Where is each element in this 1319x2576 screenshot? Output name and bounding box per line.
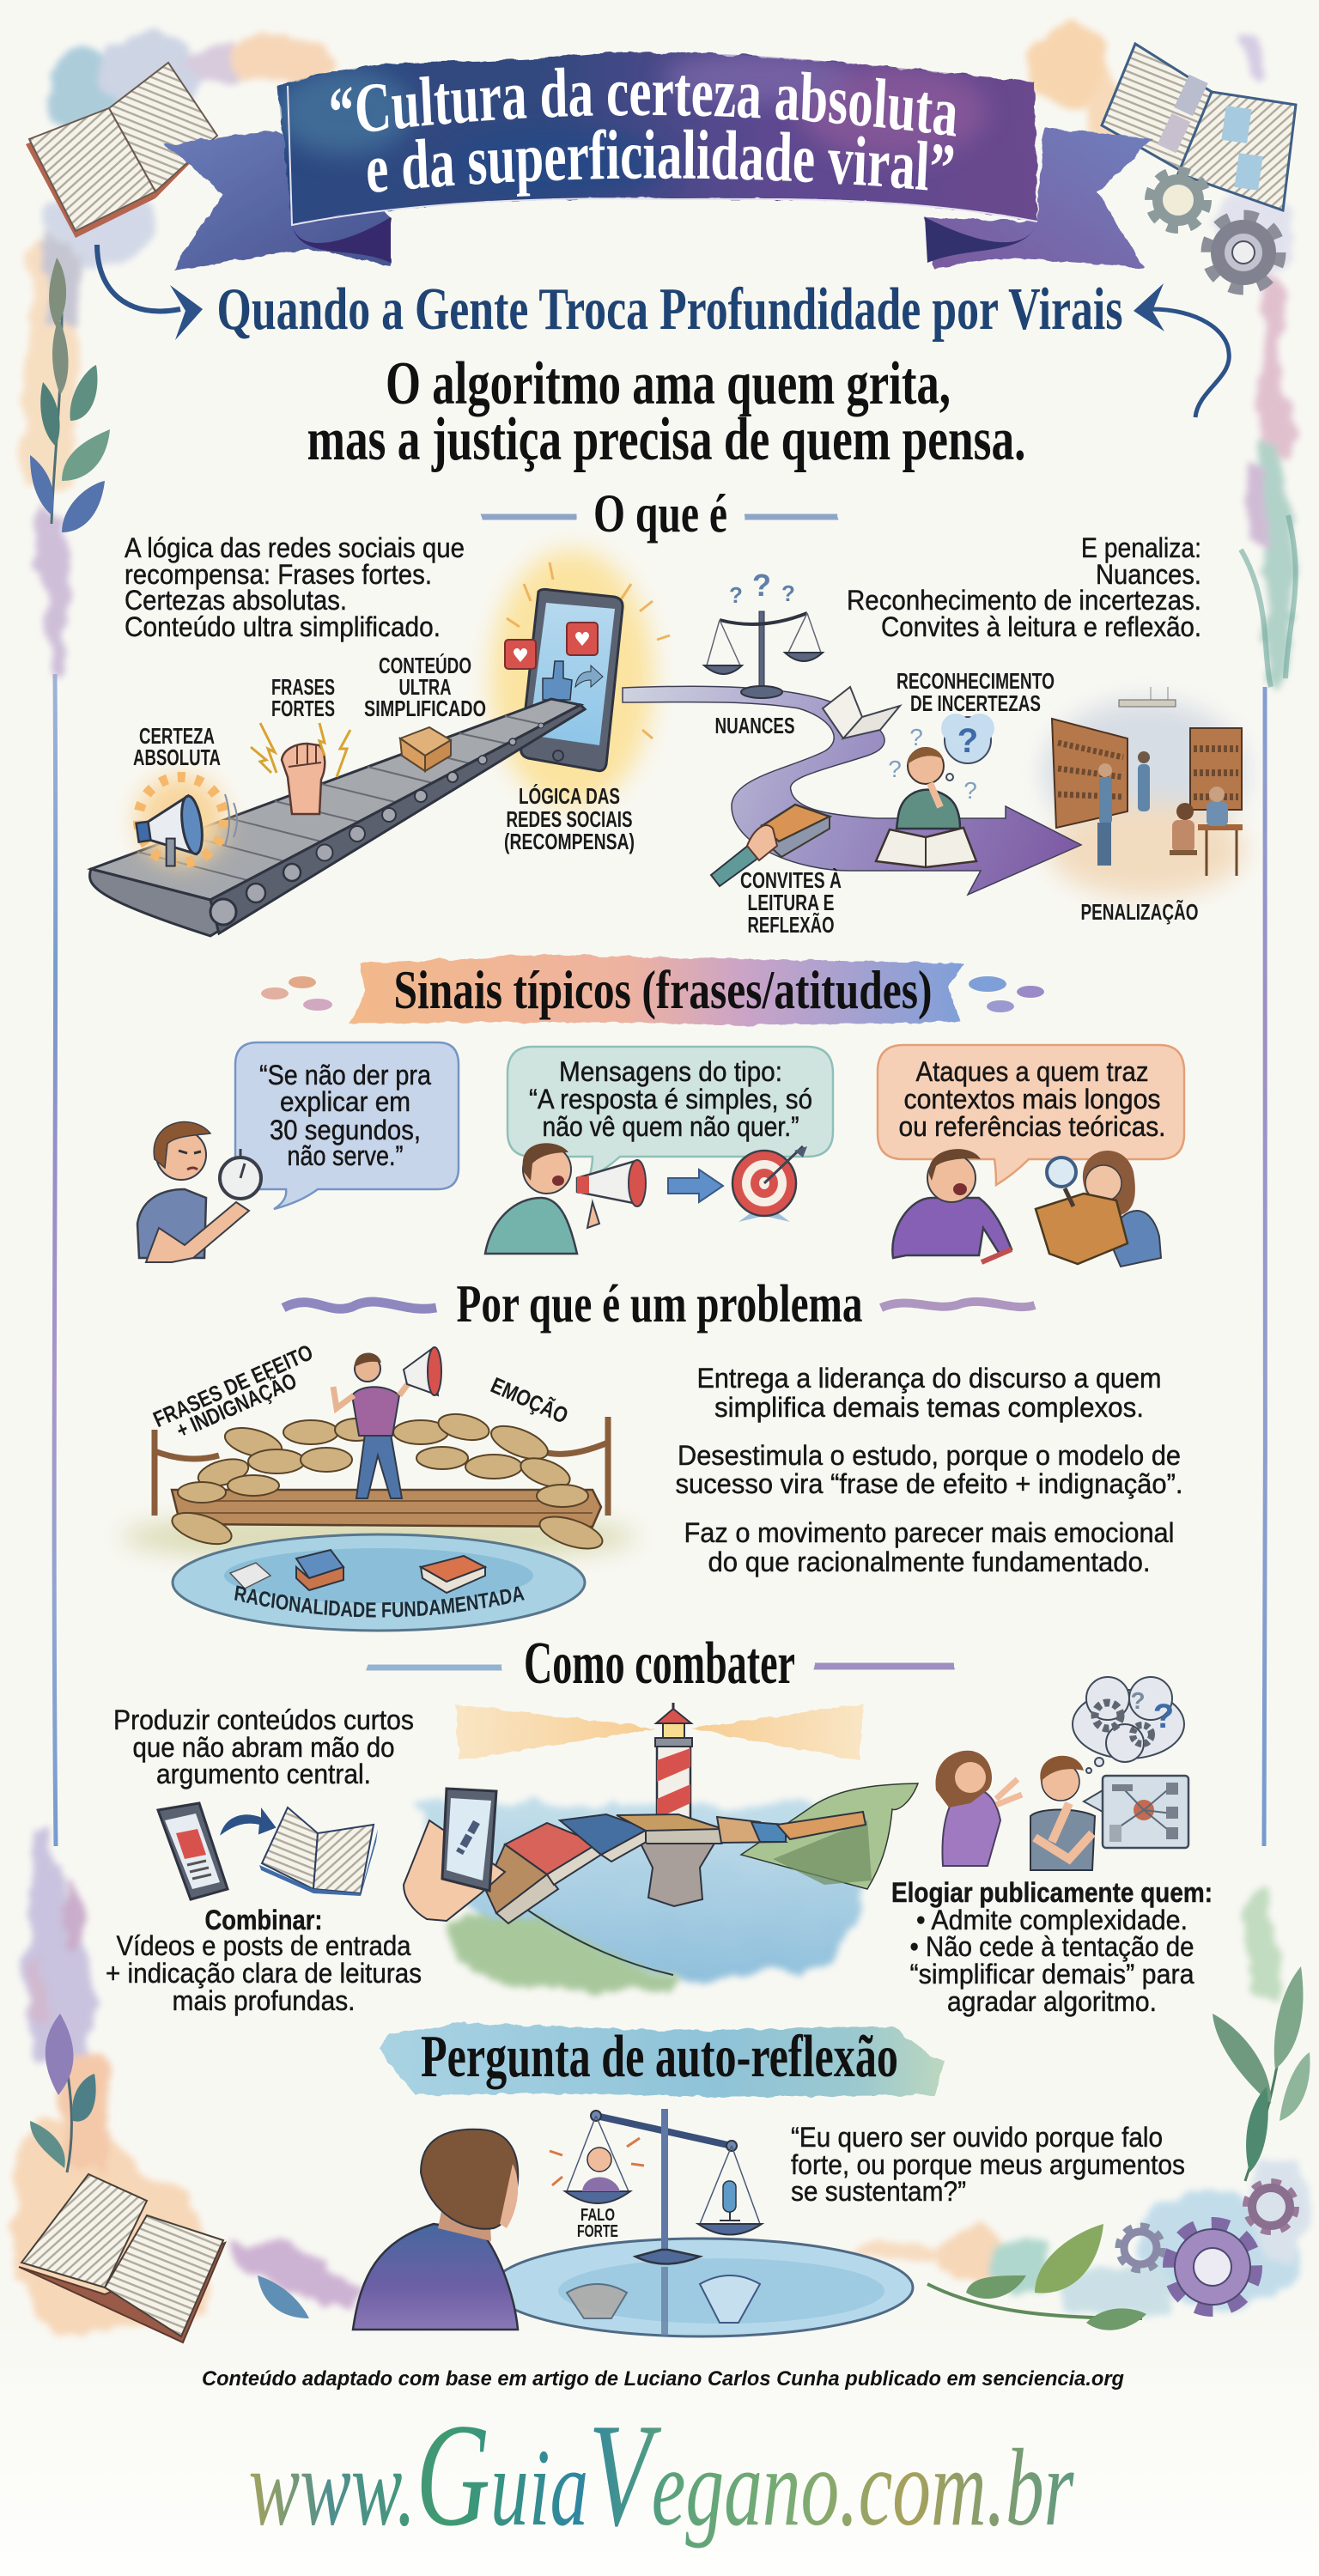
speech bubble: mensagens: não vê quem não quer.” [543,1111,799,1142]
icon: man seen from behind [353,2129,518,2330]
panel: como combater [106,1631,1213,2017]
arrow: right to subtitle [1134,283,1229,417]
panel: por que é um problema [117,1245,1183,1631]
labels: road [714,668,1199,938]
text: por que list [675,1363,1183,1577]
top-right washes [982,21,1295,687]
text: left description: A lógica das redes sociais que [125,532,465,563]
labels: road: DE INCERTEZAS [910,690,1041,716]
labels: slogan words: FRASES DE EFEITO [149,1339,317,1432]
bottom-right washes, leaves and gears [846,1889,1310,2320]
labels: road: REFLEXÃO [747,912,835,938]
right flowing streaks [1241,515,1296,687]
text: por que list: Entrega a liderança do discurso a quem [697,1363,1161,1394]
icon: man with stopwatch [137,1122,261,1262]
speech bubble: 30 segundos: 30 segundos, [270,1115,421,1145]
bottom-left washes and leaves [13,1829,352,2336]
panel: title ribbon [130,52,1153,304]
labels: conveyor: SIMPLIFICADO [364,696,486,721]
icon: phone with video [158,1803,228,1899]
text: right description: Nuances. [1096,559,1201,590]
ribbon main band [277,52,1037,225]
labels: conveyor: LÓGICA DAS [519,783,620,809]
speech bubble: mensagens: Mensagens do tipo: [559,1056,782,1087]
icon: library scene [1052,687,1243,876]
text: question quote: forte, ou porque meus argumentos [791,2149,1185,2180]
icon: raised fist [251,723,350,814]
speech bubble: mensagens: “A resposta é simples, só [529,1084,812,1115]
label: falo forte: FORTE [577,2222,618,2241]
icon: woman and man with thought cloud [936,1751,1095,1870]
left sprig of leaves [30,258,110,532]
label: falo forte: FALO [580,2206,615,2225]
labels: slogan words: EMOÇÃO [487,1372,572,1429]
text: question quote: “Eu quero ser ouvido porque falo [791,2122,1163,2153]
icon: target [732,1146,807,1222]
text: left description: Certezas absolutas. [125,585,347,616]
speech bubble: ataques: Ataques a quem traz [915,1056,1149,1087]
title text: e da superficialidade viral” [368,129,953,197]
library background wash [1043,700,1246,897]
text: combinar [106,1905,422,2016]
labels: conveyor: FRASES [271,674,335,700]
speech bubble: 30 segundos: não serve.” [287,1140,404,1171]
icon: phone with reactions [490,550,670,807]
speech bubble: 30 segundos: “Se não der pra [259,1060,431,1091]
icon: cardboard box [400,727,451,771]
ribbon left tail [164,131,391,270]
heading band: pergunta [379,2023,945,2097]
illustration: man with megaphone [333,1347,441,1498]
panel: sinais típicos [137,955,1184,1267]
winding road arrow [623,686,1081,895]
tagline: mas a justiça precisa de quem pensa. [307,406,1025,473]
icon: thinking reader: ? [909,724,923,750]
labels: conveyor: (RECOMPENSA) [504,829,635,854]
icon: gears top right [1150,172,1279,289]
text: left description: Conteúdo ultra simplificado. [125,611,441,642]
text: question quote [791,2122,1185,2207]
text: right description [847,532,1201,642]
speech bubble: ataques: contextos mais longos [903,1084,1161,1115]
labels: conveyor: CERTEZA [139,723,215,749]
footer: credit line: Conteúdo adaptado com base em artigo de Luciano Carlos Cunha publicado em senciencia.org [202,2367,1124,2391]
text: por que list: Desestimula o estudo, porque o modelo de [678,1440,1181,1471]
icon: megaphone with burst [133,775,237,871]
text: right description: Reconhecimento de incertezas. [847,585,1201,616]
icon: open book top left [26,63,217,238]
text: por que list: do que racionalmente fundamentado. [708,1546,1151,1577]
text: produzir [113,1704,414,1789]
sea [416,1803,863,1984]
arrow: left to subtitle [97,245,203,340]
text: elogiar: “simplificar demais” para [910,1959,1194,1990]
text: right description: E penaliza: [1081,532,1201,563]
icon: thinking reader: ? [957,722,978,760]
text: por que list: Faz o movimento parecer mais emocional [684,1517,1175,1548]
text: left description [125,532,465,642]
labels: road: LEITURA E [747,890,835,915]
icon: angry man [892,1149,1012,1262]
icon: thought cloud with gears: ? [1153,1698,1174,1735]
icon: open book on road [823,687,900,738]
text: produzir: que não abram mão do [132,1732,395,1763]
left vertical frame line [54,674,56,1846]
title text: “Cultura da certeza absoluta [331,67,957,137]
labels: conveyor: FORTES [271,696,335,721]
text: elogiar: agradar algoritmo. [947,1986,1157,2017]
text: por que list: sucesso vira “frase de efeito + indignação”. [675,1468,1183,1499]
text: combinar: Combinar: [204,1905,323,1935]
text: elogiar: • Não cede à tentação de [910,1931,1194,1962]
conveyor belt [89,699,585,936]
heading: por que: Por que é um problema [457,1275,862,1334]
labels: road: NUANCES [714,713,795,738]
icon: phone with reactions: ♥ [574,629,591,651]
heading: como combater: Como combater [524,1631,795,1697]
icon: open book bottom left [19,2174,225,2342]
illustration: lighthouse over book bridge [404,1703,918,1992]
ribbon right tail [925,127,1152,268]
illustration: sandbags platform [121,1410,636,1563]
text: combinar: + indicação clara de leituras [106,1958,422,1989]
text: question quote: se sustentam?” [791,2176,966,2207]
icon: phone with reactions: ♥ [512,646,529,667]
text: produzir: Produzir conteúdos curtos [113,1704,414,1735]
label: falo forte [577,2206,618,2241]
icon: reflecting pool [492,2239,913,2336]
labels: conveyor [133,653,635,854]
icon: thought cloud with gears: ? [1130,1687,1146,1714]
icon: balance scale with question marks: ? [752,568,771,603]
text: elogiar: • Admite complexidade. [916,1905,1188,1935]
text: elogiar: Elogiar publicamente quem: [891,1877,1213,1908]
heading: o que é: O que é [593,483,727,544]
speech bubble: mensagens [508,1047,833,1178]
speech bubble: ataques: ou referências teóricas. [898,1111,1166,1142]
tagline [307,350,1025,473]
text: right description: Convites à leitura e reflexão. [881,611,1201,642]
pillar [640,1842,715,1906]
speech bubble: ataques [878,1045,1184,1185]
icon: man shouting into megaphone [485,1143,646,1254]
icon: bottom-right gears [1119,2183,1295,2310]
text: por que list: simplifica demais temas complexos. [714,1392,1144,1423]
icon: thought cloud with gears [1073,1677,1184,1773]
top-left washes [23,34,339,678]
labels: conveyor: CONTEÚDO [379,653,471,678]
text: left description: recompensa: Frases fortes. [125,559,432,590]
labels: road: RECONHECIMENTO [897,668,1055,694]
panel: pergunta de auto-reflexão [19,2023,1185,2342]
labels: road: PENALIZAÇÃO [1080,899,1199,925]
labels: slogan words [149,1339,572,1443]
footer: site logo: www.GuiaVegano.com.br [249,2394,1074,2557]
speech bubble: 30 segundos [235,1042,459,1209]
illustration: pond with sunken books: RACIONALIDADE FUNDAMENTADA [234,1585,525,1618]
title text [331,67,957,197]
tower [657,1746,690,1820]
heading band: pergunta: Pergunta de auto-reflexão [421,2024,898,2090]
panel: o que é [89,483,1246,938]
text: combinar: mais profundas. [172,1985,356,2016]
icon: balance scale with question marks: ? [781,580,795,606]
text: elogiar [891,1877,1213,2017]
labels: conveyor: ULTRA [398,674,452,700]
text: produzir: argumento central. [156,1759,371,1789]
icon: open book [259,1807,378,1896]
light beams [455,1704,657,1760]
icon: concept board [1084,1776,1188,1848]
labels: slogan words: + INDIGNAÇÃO [173,1368,301,1443]
hand holding phone [404,1820,505,1921]
icon: book in hand [711,805,830,886]
arrow: phone to book [222,1810,275,1833]
icon: balance scale with question marks [704,568,823,698]
tagline: O algoritmo ama quem grita, [386,350,951,417]
arrow: megaphone to target [668,1170,723,1202]
icon: open book top right [1102,44,1296,210]
icon: woman with book and magnifier [1036,1151,1161,1267]
labels: conveyor: ABSOLUTA [133,744,221,770]
labels: road: CONVITES À [740,867,842,893]
icon: thinking reader [876,714,994,867]
book bridge [496,1874,558,1923]
icon: balance scale with question marks: ? [729,582,743,608]
icon: weighing scale [550,2109,762,2263]
illustration: pond with sunken books [172,1534,586,1631]
labels: conveyor: REDES SOCIAIS [507,806,632,832]
icon: thinking reader: ? [963,777,977,804]
text: combinar: Vídeos e posts de entrada [117,1930,411,1961]
right vertical frame line [1264,687,1265,1846]
speech bubble: 30 segundos: explicar em [280,1086,410,1117]
heading band: sinais típicos: Sinais típicos (frases/atitudes) [393,959,933,1020]
icon: thinking reader: ? [888,756,902,782]
heading band: sinais típicos [261,955,1044,1025]
